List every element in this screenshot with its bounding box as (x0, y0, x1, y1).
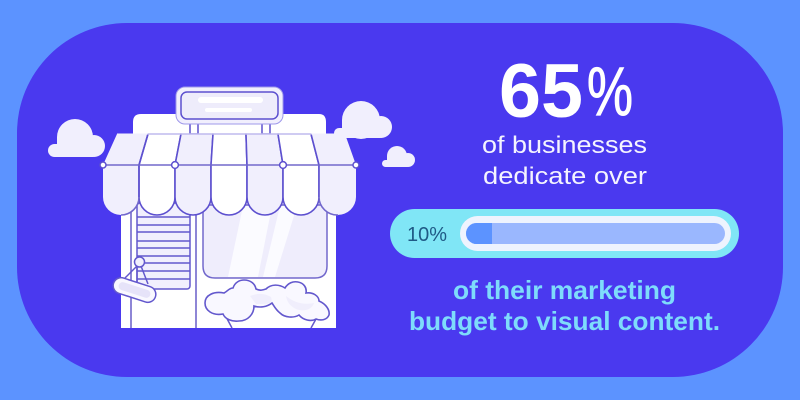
awning dots (100, 162, 359, 168)
door blind (137, 203, 190, 289)
text: intro (482, 132, 647, 190)
stat: 65%: % (587, 53, 633, 130)
icon: large right cloud (334, 101, 392, 139)
shop sign (176, 87, 283, 124)
door frame lines (131, 200, 196, 328)
stat: 65% (499, 49, 633, 134)
flower box (205, 280, 329, 328)
text: conclusion: of their marketing (453, 275, 676, 305)
building wall (121, 200, 336, 328)
text: intro: dedicate over (483, 163, 647, 190)
text: intro: of businesses (482, 132, 647, 159)
icon: small right cloud (382, 146, 415, 167)
bar label: 10% (407, 224, 447, 246)
text: conclusion (409, 275, 720, 336)
progress bar (390, 209, 739, 258)
sign posts (190, 123, 270, 134)
icon: left cloud (48, 119, 105, 157)
hanging sign (111, 257, 158, 304)
icon: storefront (100, 87, 359, 328)
stat: 65%: 65 (499, 49, 583, 134)
text: conclusion: budget to visual content. (409, 306, 720, 336)
shop window (203, 205, 327, 278)
awning (103, 134, 356, 215)
roof block (133, 114, 326, 134)
